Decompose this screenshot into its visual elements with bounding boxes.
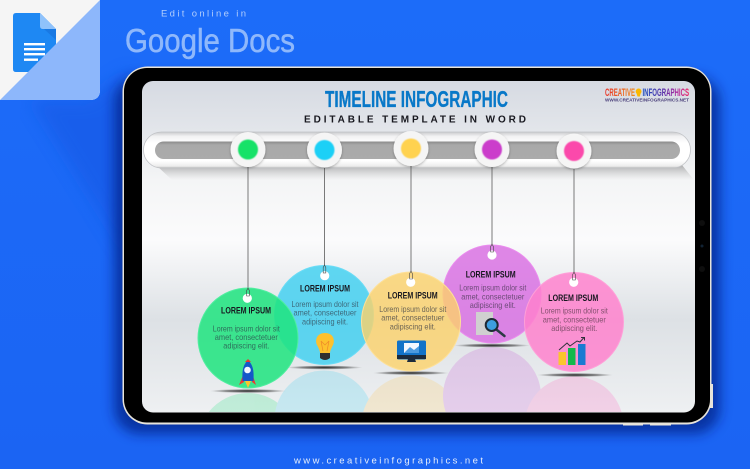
logo: INFOGRAPHICS xyxy=(642,87,689,99)
timeline knob 3 xyxy=(394,131,428,166)
title: TIMELINE INFOGRAPHIC xyxy=(325,86,508,112)
card 4 purple: Lorem ipsum dolor sit xyxy=(459,284,527,293)
card 4 purple: adipiscing elit. xyxy=(470,301,516,310)
timeline knob 5 xyxy=(556,134,592,168)
card 3 yellow: amet, consectetuer xyxy=(381,314,445,323)
card 2 blue: Lorem ipsum dolor sit xyxy=(292,300,359,309)
icon: light bulb xyxy=(316,333,334,360)
card 3 yellow: adipiscing elit. xyxy=(390,322,436,331)
tablet buttons xyxy=(699,220,705,272)
tablet shadow xyxy=(114,76,720,434)
card 3 yellow xyxy=(362,271,460,371)
card 4 purple: LOREM IPSUM xyxy=(466,270,516,280)
card 4 purple: amet, consectetuer xyxy=(461,292,525,301)
website footer: www.creativeinfographics.net xyxy=(293,456,483,466)
card 1 green: amet, consectetuer xyxy=(215,333,278,342)
screen xyxy=(142,81,695,412)
badge fold xyxy=(0,0,100,100)
card 2 blue xyxy=(274,265,374,364)
icon: logo bulb xyxy=(636,88,641,96)
card 4 purple xyxy=(443,244,541,343)
icon: bar chart xyxy=(558,338,586,365)
ground shadows xyxy=(210,344,613,393)
card 5 pink: LOREM IPSUM xyxy=(548,293,598,303)
card 3 yellow: Lorem ipsum dolor sit xyxy=(379,305,447,314)
card 2 blue: amet, consectetuer xyxy=(294,309,357,318)
reflections xyxy=(209,347,622,412)
card 5 pink: adipiscing elit. xyxy=(551,324,597,333)
timeline knob 1 xyxy=(230,132,266,167)
icon: document xyxy=(13,13,56,72)
timeline bar xyxy=(144,132,694,180)
logo: CREATIVE xyxy=(605,87,635,99)
logo xyxy=(605,87,689,103)
timeline knob 4 xyxy=(474,132,510,167)
timeline knob 2 xyxy=(307,132,342,168)
subtitle: EDITABLE TEMPLATE IN WORD xyxy=(304,114,526,126)
corner badge xyxy=(0,0,100,100)
Google Docs wordmark: Google Docs xyxy=(125,22,295,59)
card 5 pink xyxy=(524,272,624,372)
icon: rocket xyxy=(239,359,256,388)
logo: WWW.CREATIVEINFOGRAPHICS.NET xyxy=(605,97,689,103)
card 1 green xyxy=(198,288,298,388)
card 5 pink: Lorem ipsum dolor sit xyxy=(541,307,608,316)
card 5 pink: amet, consectetuer xyxy=(543,315,606,324)
diagonal shade xyxy=(30,70,130,260)
card 2 blue: LOREM IPSUM xyxy=(300,283,350,293)
card 2 blue: adipiscing elit. xyxy=(302,317,348,326)
card 1 green: Lorem ipsum dolor sit xyxy=(213,324,280,334)
tablet xyxy=(122,66,713,426)
card 1 green: LOREM IPSUM xyxy=(221,306,271,316)
card 3 yellow: LOREM IPSUM xyxy=(388,290,438,300)
card 1 green: adipiscing elit. xyxy=(223,342,269,351)
hanging strings xyxy=(248,166,574,288)
icon: monitor xyxy=(397,340,426,362)
icon: magnifier xyxy=(476,312,504,336)
edit online caption: Edit online in xyxy=(161,8,246,20)
